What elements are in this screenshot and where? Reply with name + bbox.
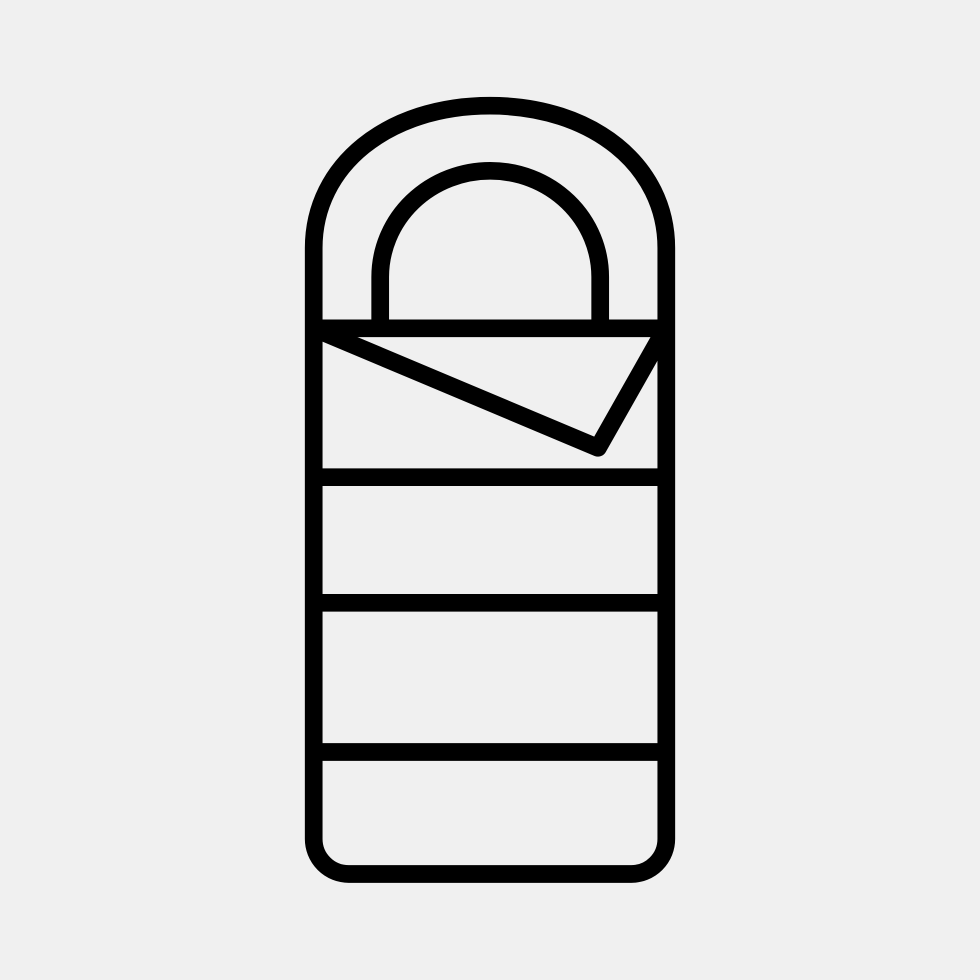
hood opening xyxy=(380,171,600,328)
baffle line 1 xyxy=(313,468,667,486)
flap fold xyxy=(322,332,663,448)
bag outline xyxy=(314,106,666,874)
baffle line 3 xyxy=(313,743,667,761)
collar line xyxy=(313,319,667,337)
baffle line 2 xyxy=(313,594,667,612)
